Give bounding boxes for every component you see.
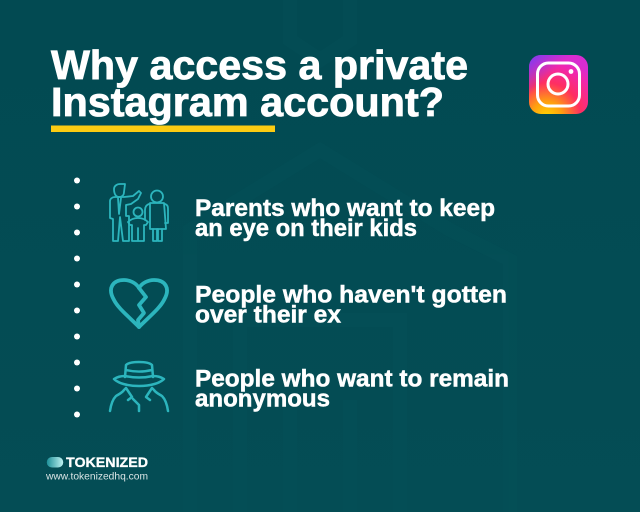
dotted timeline	[74, 178, 80, 418]
text: parents: an eye on their kids	[195, 215, 417, 242]
logo: tokenized: TOKENIZED	[66, 455, 148, 470]
icon: family	[110, 184, 168, 241]
website url: www.tokenizedhq.com	[45, 470, 148, 482]
background pattern	[190, 0, 510, 512]
icon: broken heart	[111, 280, 167, 327]
title: Why access a private	[51, 42, 468, 88]
title underline	[51, 126, 275, 132]
text: ex	[195, 282, 507, 328]
text: parents	[195, 195, 495, 242]
text: ex: over their ex	[195, 302, 341, 328]
title: Instagram account?	[51, 79, 444, 125]
text: ex: People who haven't gotten	[195, 282, 507, 308]
text: anonymous: anonymous	[195, 386, 330, 412]
text: anonymous	[195, 366, 509, 412]
text: parents: Parents who want to keep	[195, 195, 495, 222]
icon: anonymous person with hat	[110, 362, 168, 411]
title	[51, 42, 468, 125]
text: anonymous: People who want to remain	[195, 366, 509, 392]
icon: instagram logo	[529, 55, 588, 114]
